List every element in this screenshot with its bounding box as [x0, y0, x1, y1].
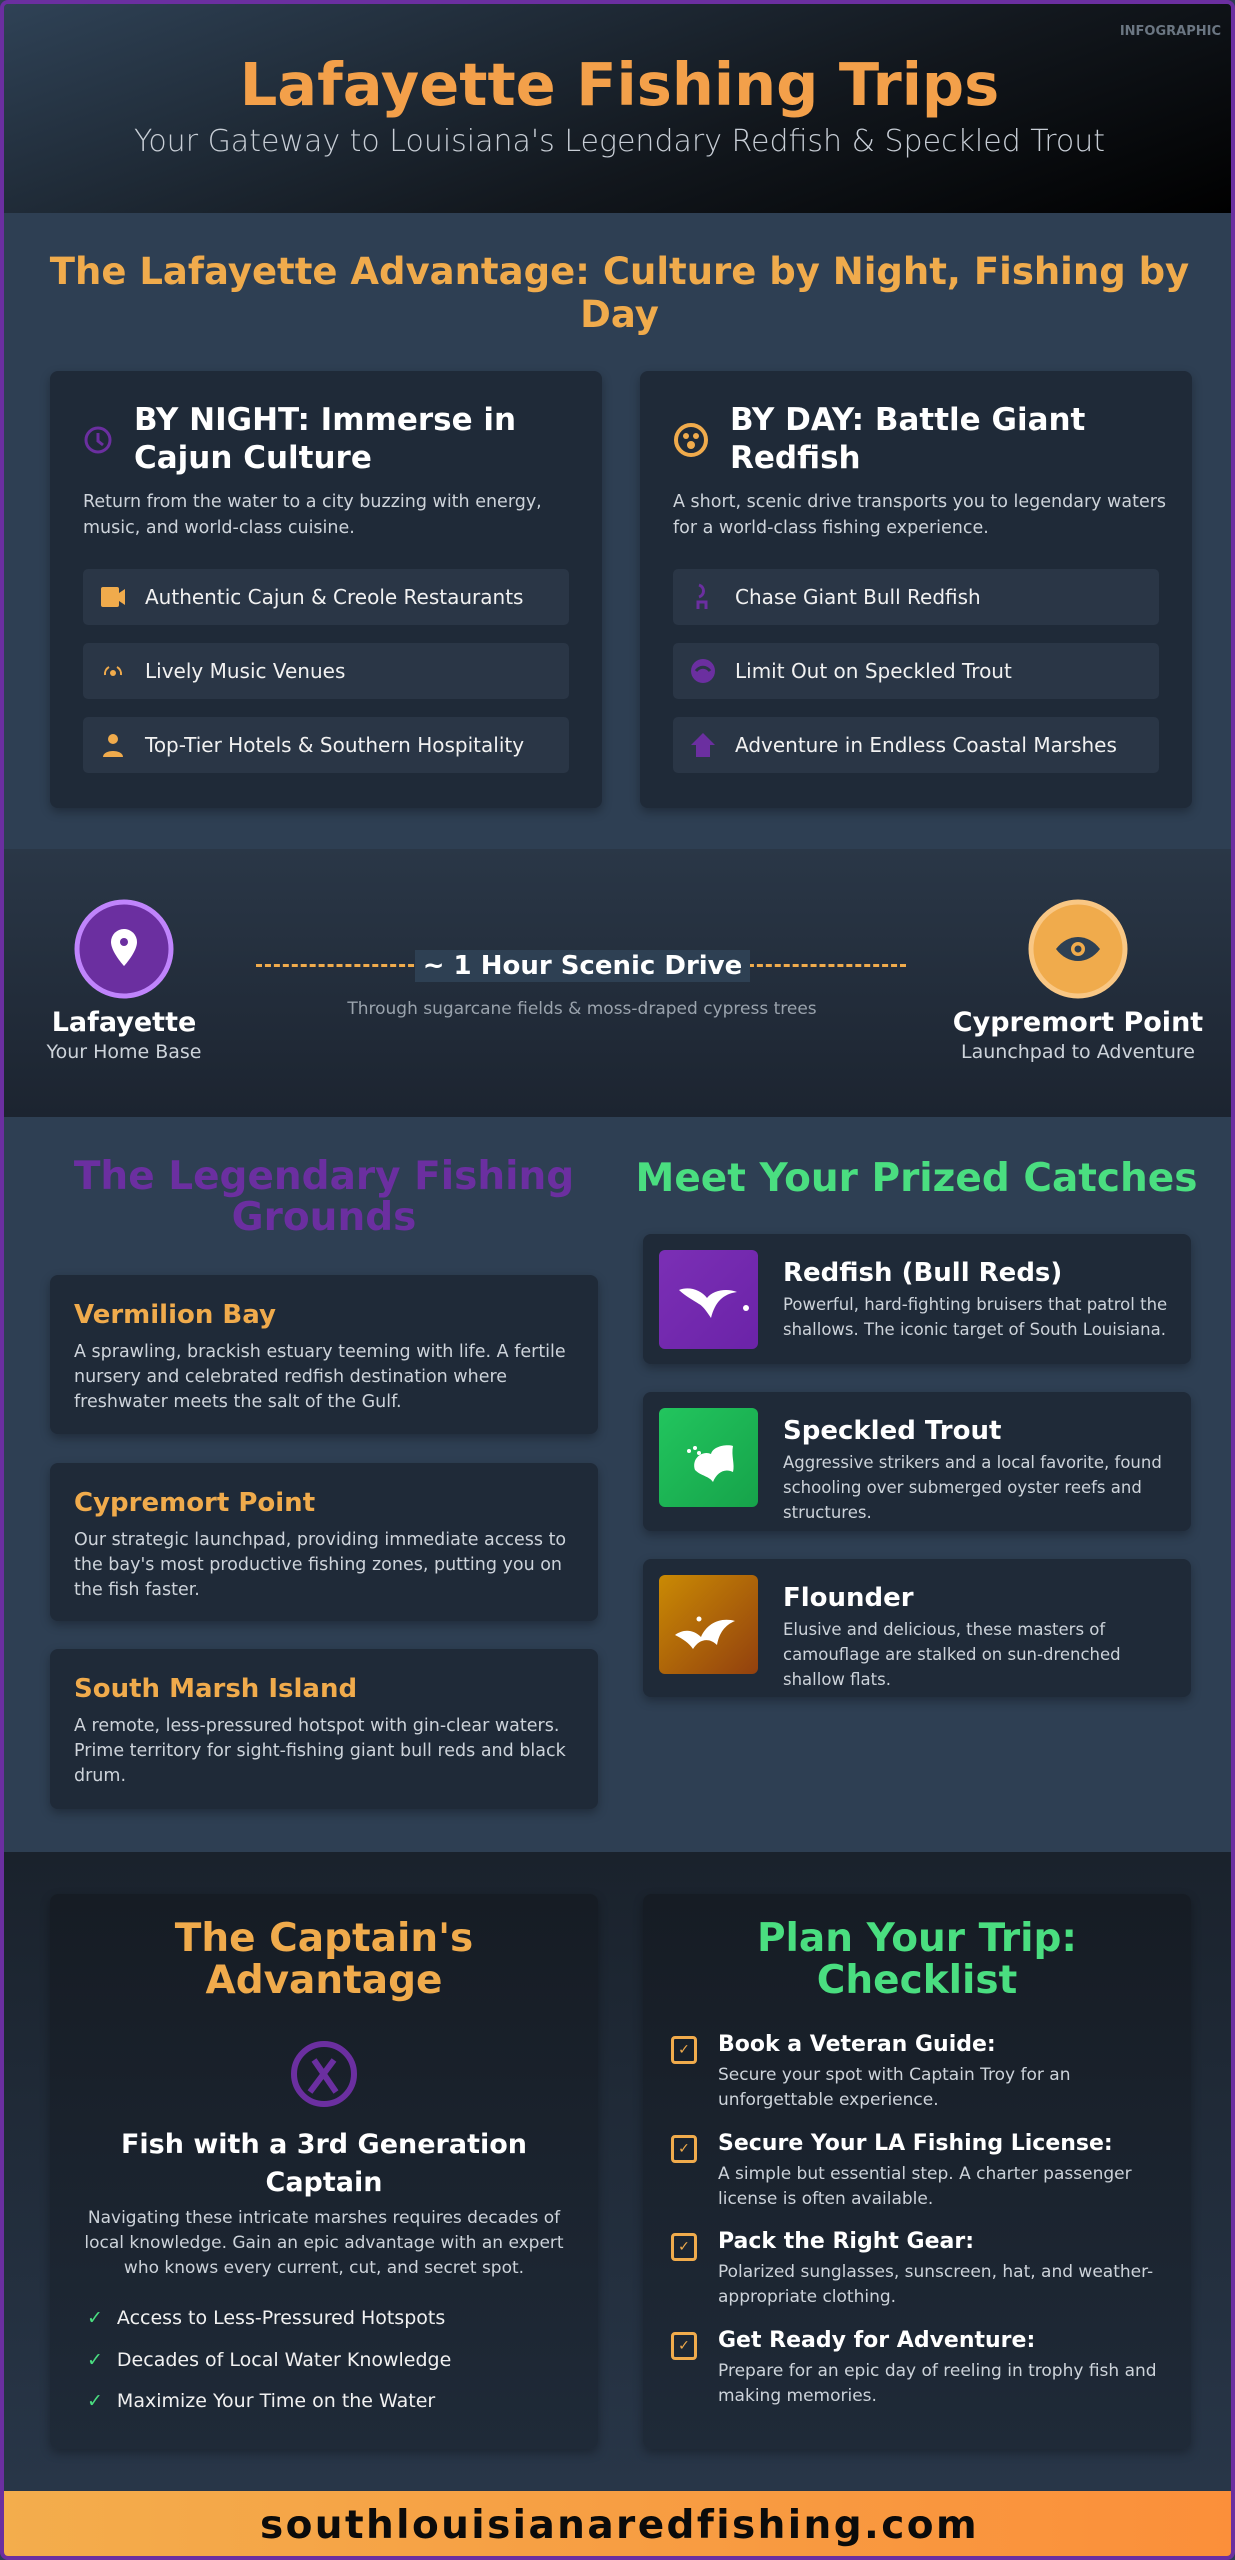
- icon: captain: [291, 2041, 357, 2107]
- item: Adventure in Endless Coastal Marshes: [735, 733, 1117, 757]
- panel: by night: [50, 371, 602, 808]
- card: Redfish: [643, 1234, 1191, 1364]
- icon: flounder: [659, 1575, 758, 1674]
- item: [83, 717, 569, 773]
- icon: eye circle: [1028, 900, 1128, 998]
- card: Flounder: Flounder: [783, 1583, 914, 1613]
- icon: trout: [659, 1408, 758, 1507]
- heading: Plan Your Trip:: [757, 1916, 1077, 1961]
- footer: southlouisianaredfishing.com: [260, 2503, 979, 2548]
- label: drive: ~ 1 Hour Scenic Drive: [423, 951, 742, 981]
- card: Vermilion Bay: A sprawling, brackish estuary teeming with life. A fertile nursery and celebrated redfish destination where freshwater meets the salt of the Gulf.: [74, 1342, 566, 1412]
- panel: checklist: ✓: [678, 2141, 690, 2157]
- item: Top-Tier Hotels & Southern Hospitality: [145, 733, 524, 757]
- text: Navigating these intricate marshes requires decades of local knowledge. Gain an epic advantage with an expert who knows every current, cut, and secret spot.: [84, 2208, 564, 2278]
- heading: BY DAY: Battle Giant: [730, 402, 1085, 438]
- title: Lafayette Fishing Trips: [240, 50, 999, 119]
- panel: checklist: Secure your spot with Captain Troy for an unforgettable experience.: [718, 2065, 1070, 2110]
- checklist item: [671, 2229, 1153, 2307]
- panel: checklist: Get Ready for Adventure:: [718, 2328, 1035, 2353]
- checklist item: [671, 2131, 1132, 2209]
- section heading: Lafayette advantage: [50, 250, 1189, 336]
- heading: Advantage: [206, 1958, 442, 2003]
- card: Speckled Trout: [643, 1392, 1191, 1531]
- item: [673, 643, 1159, 699]
- subheading: Captain: [266, 2167, 382, 2198]
- header: [4, 4, 1235, 213]
- subheading: [121, 2129, 527, 2198]
- panel: checklist: [643, 1894, 1191, 2449]
- sublabel: Your Home Base: [46, 1041, 202, 1063]
- icon: redfish: [659, 1250, 758, 1349]
- item: [83, 569, 569, 625]
- card: South Marsh Island: A remote, less-pressured hotspot with gin-clear waters. Prime territory for sight-fishing giant bull reds and black drum.: [74, 1716, 566, 1786]
- card: Flounder: Elusive and delicious, these masters of camouflage are stalked on sun-drenched shallow flats.: [783, 1620, 1121, 1689]
- sublabel: Launchpad to Adventure: [961, 1041, 1195, 1063]
- check item: ✓ Maximize Your Time on the Water: [87, 2390, 435, 2412]
- panel: by day: [640, 371, 1192, 808]
- item: Lively Music Venues: [145, 659, 345, 683]
- card: Redfish: Powerful, hard-fighting bruisers that patrol the shallows. The iconic target of South Louisiana.: [783, 1295, 1167, 1339]
- card: Vermilion Bay: [50, 1275, 598, 1434]
- item: [673, 717, 1159, 773]
- subheading: Fish with a 3rd Generation: [121, 2129, 527, 2160]
- arrow: dashed route: [256, 964, 906, 967]
- item: Limit Out on Speckled Trout: [735, 659, 1012, 683]
- panel: checklist: ✓: [678, 2338, 690, 2354]
- icon: clock: [84, 426, 112, 454]
- card: Vermilion Bay: Vermilion Bay: [74, 1300, 276, 1330]
- section heading: Lafayette advantage: The Lafayette Advantage: Culture by Night, Fishing by: [50, 250, 1189, 293]
- check item: ✓ Decades of Local Water Knowledge: [87, 2349, 451, 2371]
- check item: ✓ Access to Less-Pressured Hotspots: [87, 2307, 445, 2329]
- section heading: Lafayette advantage: Day: [580, 293, 659, 336]
- tag: infographic: INFOGRAPHIC: [1120, 24, 1221, 39]
- section: drive: [4, 849, 1235, 1117]
- heading: Redfish: [730, 440, 861, 476]
- heading: The Captain's: [175, 1916, 473, 1961]
- panel: checklist: Book a Veteran Guide:: [718, 2032, 996, 2057]
- subtext: Through sugarcane fields & moss-draped cypress trees: [347, 999, 817, 1019]
- heading: BY NIGHT: Immerse in: [134, 402, 516, 438]
- section: bottom: [4, 1852, 1235, 2491]
- heading: Cajun Culture: [134, 440, 372, 476]
- panel: checklist: ✓: [678, 2239, 690, 2255]
- icon: pin circle: [74, 900, 174, 998]
- item: Chase Giant Bull Redfish: [735, 585, 981, 609]
- card: South Marsh Island: South Marsh Island: [74, 1674, 357, 1704]
- card: Speckled Trout: Speckled Trout: [783, 1416, 1001, 1446]
- card: Flounder: [643, 1559, 1191, 1697]
- panel: checklist: Prepare for an epic day of reeling in trophy fish and making memories.: [718, 2361, 1157, 2406]
- heading: [174, 1916, 473, 2003]
- heading: Checklist: [817, 1958, 1017, 2003]
- heading: [757, 1916, 1077, 2003]
- label: Lafayette: Lafayette: [52, 1007, 196, 1038]
- checklist item: [671, 2032, 1070, 2110]
- card: Cypremort Point: Cypremort Point: [74, 1488, 315, 1518]
- heading: [730, 402, 1085, 476]
- label: Cypremort Point: Cypremort Point: [953, 1007, 1203, 1038]
- panel: checklist: A simple but essential step. A charter passenger license is often available.: [718, 2164, 1132, 2209]
- subtitle: Your Gateway to Louisiana's Legendary Redfish & Speckled Trout: [134, 124, 1105, 159]
- panel: checklist: Pack the Right Gear:: [718, 2229, 974, 2254]
- heading: prized catches: Meet Your Prized Catches: [636, 1156, 1197, 1201]
- checklist item: [671, 2328, 1157, 2406]
- panel: checklist: Polarized sunglasses, sunscreen, hat, and weather-appropriate clothing.: [718, 2262, 1153, 2307]
- item: [83, 643, 569, 699]
- card: South Marsh Island: [50, 1649, 598, 1809]
- item: Authentic Cajun & Creole Restaurants: [145, 585, 523, 609]
- heading: [134, 402, 516, 476]
- item: [673, 569, 1159, 625]
- card: Cypremort Point: [50, 1463, 598, 1621]
- text: Return from the water to a city buzzing with energy, music, and world-class cuisine.: [83, 492, 542, 538]
- text: A short, scenic drive transports you to legendary waters for a world-class fishing experience.: [673, 492, 1166, 538]
- panel: checklist: ✓: [678, 2042, 690, 2058]
- panel: checklist: Secure Your LA Fishing License:: [718, 2131, 1113, 2156]
- icon: reel: [674, 423, 708, 457]
- card: Speckled Trout: Aggressive strikers and a local favorite, found schooling over submerged oyster reefs and structures.: [783, 1453, 1162, 1522]
- card: Redfish: Redfish (Bull Reds): [783, 1258, 1062, 1288]
- heading: fishing grounds: The Legendary Fishing Grounds: [74, 1154, 574, 1240]
- card: Cypremort Point: Our strategic launchpad, providing immediate access to the bay's most productive fishing zones, putting you on the fish faster.: [74, 1530, 566, 1600]
- panel: captain: [50, 1894, 598, 2449]
- footer: [4, 2491, 1235, 2560]
